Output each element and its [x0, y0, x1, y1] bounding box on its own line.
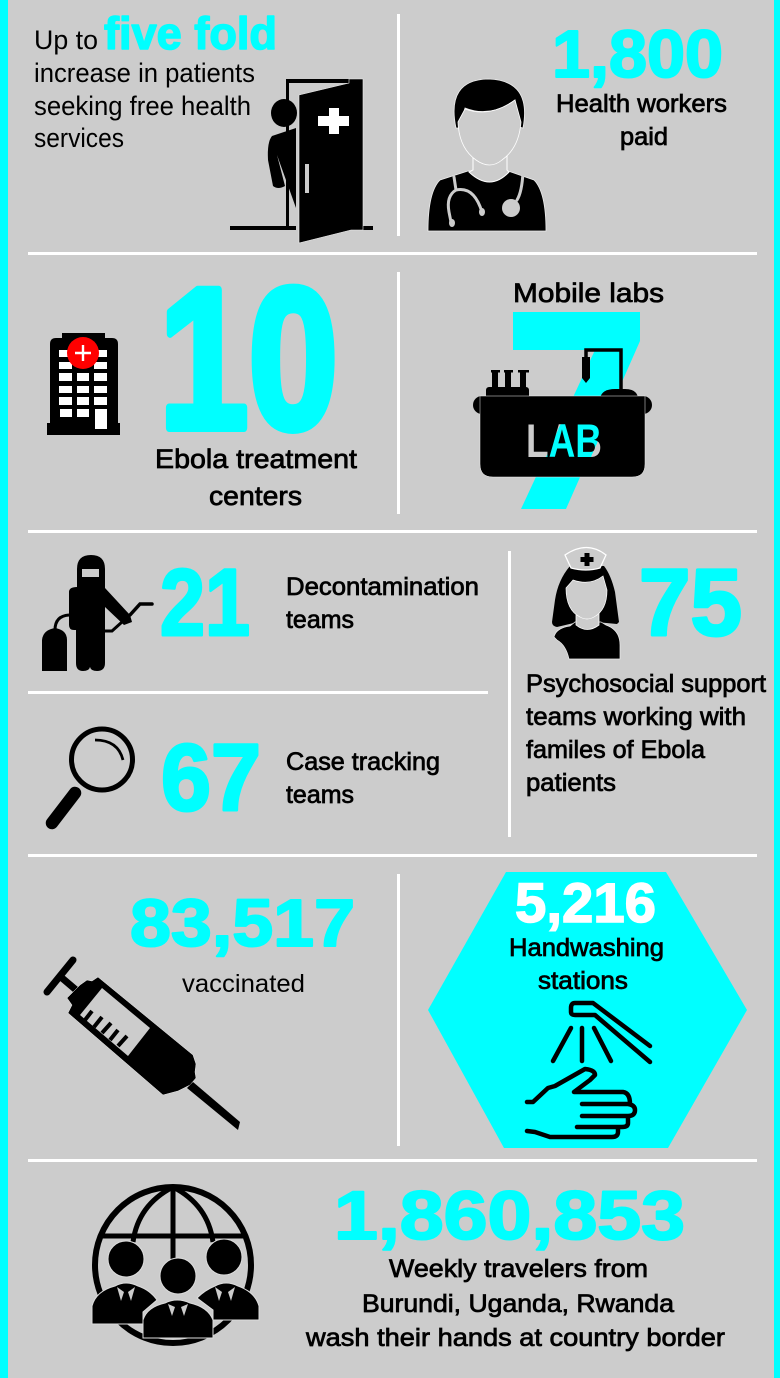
label: LAB: LAB: [526, 414, 602, 467]
text: handwashing stations: Handwashing: [509, 934, 664, 962]
text: health workers paid: [556, 90, 727, 151]
text: health workers paid: Health workers: [556, 90, 727, 118]
panel: case tracking teams: [52, 725, 440, 831]
number: 7 drawn large: [513, 312, 640, 509]
text: mobile labs: Mobile labs: [513, 278, 664, 308]
text: psychosocial support description: familes of Ebola: [526, 736, 705, 764]
icon: magnifying glass: [52, 729, 132, 823]
text: case tracking teams: Case tracking: [286, 748, 440, 776]
text: travelers wash hands at border: wash their hands at country border: [305, 1324, 725, 1352]
icon: doctor with stethoscope: [428, 79, 546, 231]
text: psychosocial support description: patients: [526, 769, 616, 797]
text: ebola treatment centers: Ebola treatment: [155, 444, 358, 474]
number: 10: 10: [159, 246, 338, 471]
text: five fold increase in patients: Up to: [34, 25, 98, 55]
text: travelers wash hands at border: [305, 1255, 725, 1352]
icon: hospital building: [47, 333, 120, 435]
text: five fold increase in patients: [34, 8, 277, 153]
text: psychosocial support description: teams working with: [526, 703, 746, 731]
panel: vaccinated: [47, 886, 355, 1130]
panel: five fold increase: [34, 8, 373, 243]
icon: person at clinic door: [230, 79, 373, 243]
text: five fold increase in patients: seeking free health: [34, 91, 251, 121]
icon: hand under water tap: [527, 1003, 650, 1137]
text: handwashing stations: [509, 934, 664, 995]
number: 1,800: 1,800: [552, 17, 723, 92]
number: 83,517: 83,517: [130, 886, 355, 961]
panel: handwashing stations: [428, 871, 747, 1148]
panel: mobile labs: [473, 278, 664, 509]
text: travelers wash hands at border: Burundi, Uganda, Rwanda: [362, 1290, 674, 1318]
text: psychosocial support description: [526, 670, 766, 797]
text: decontamination teams: [286, 573, 479, 634]
text: case tracking teams: teams: [286, 781, 354, 809]
text: vaccinated: vaccinated: [182, 970, 305, 998]
panel: ebola treatment centers: [47, 246, 358, 511]
icon: nurse: [552, 548, 620, 659]
icon: globe with people: [92, 1187, 259, 1343]
number: 5,216: 5,216: [515, 871, 656, 934]
number: 21: 21: [160, 550, 250, 656]
text: case tracking teams: [286, 748, 440, 809]
panel: psychosocial support teams: [526, 548, 766, 797]
panel: health workers paid: [428, 17, 727, 231]
icon: person in protective suit spraying: [42, 555, 152, 671]
text: travelers wash hands at border: Weekly travelers from: [389, 1255, 648, 1283]
panel: weekly travelers: [92, 1177, 725, 1352]
icon: syringe: [47, 960, 240, 1130]
text: decontamination teams: teams: [286, 606, 354, 634]
text: decontamination teams: Decontamination: [286, 573, 479, 601]
text: five fold increase in patients: five fold: [104, 8, 277, 59]
number: 75: 75: [639, 550, 742, 656]
hexagon background: [428, 872, 747, 1148]
text: five fold increase in patients: increase in patients: [34, 58, 255, 88]
text: health workers paid: paid: [620, 123, 668, 151]
icon: lab equipment: [473, 350, 652, 477]
panel: decontamination teams: [42, 550, 479, 671]
text: ebola treatment centers: centers: [209, 481, 302, 511]
text: five fold increase in patients: services: [34, 123, 124, 153]
number: 67: 67: [161, 725, 261, 831]
text: ebola treatment centers: [155, 444, 358, 511]
number: 1,860,853: 1,860,853: [334, 1177, 685, 1254]
text: psychosocial support description: Psychosocial support: [526, 670, 766, 698]
text: handwashing stations: stations: [538, 967, 628, 995]
